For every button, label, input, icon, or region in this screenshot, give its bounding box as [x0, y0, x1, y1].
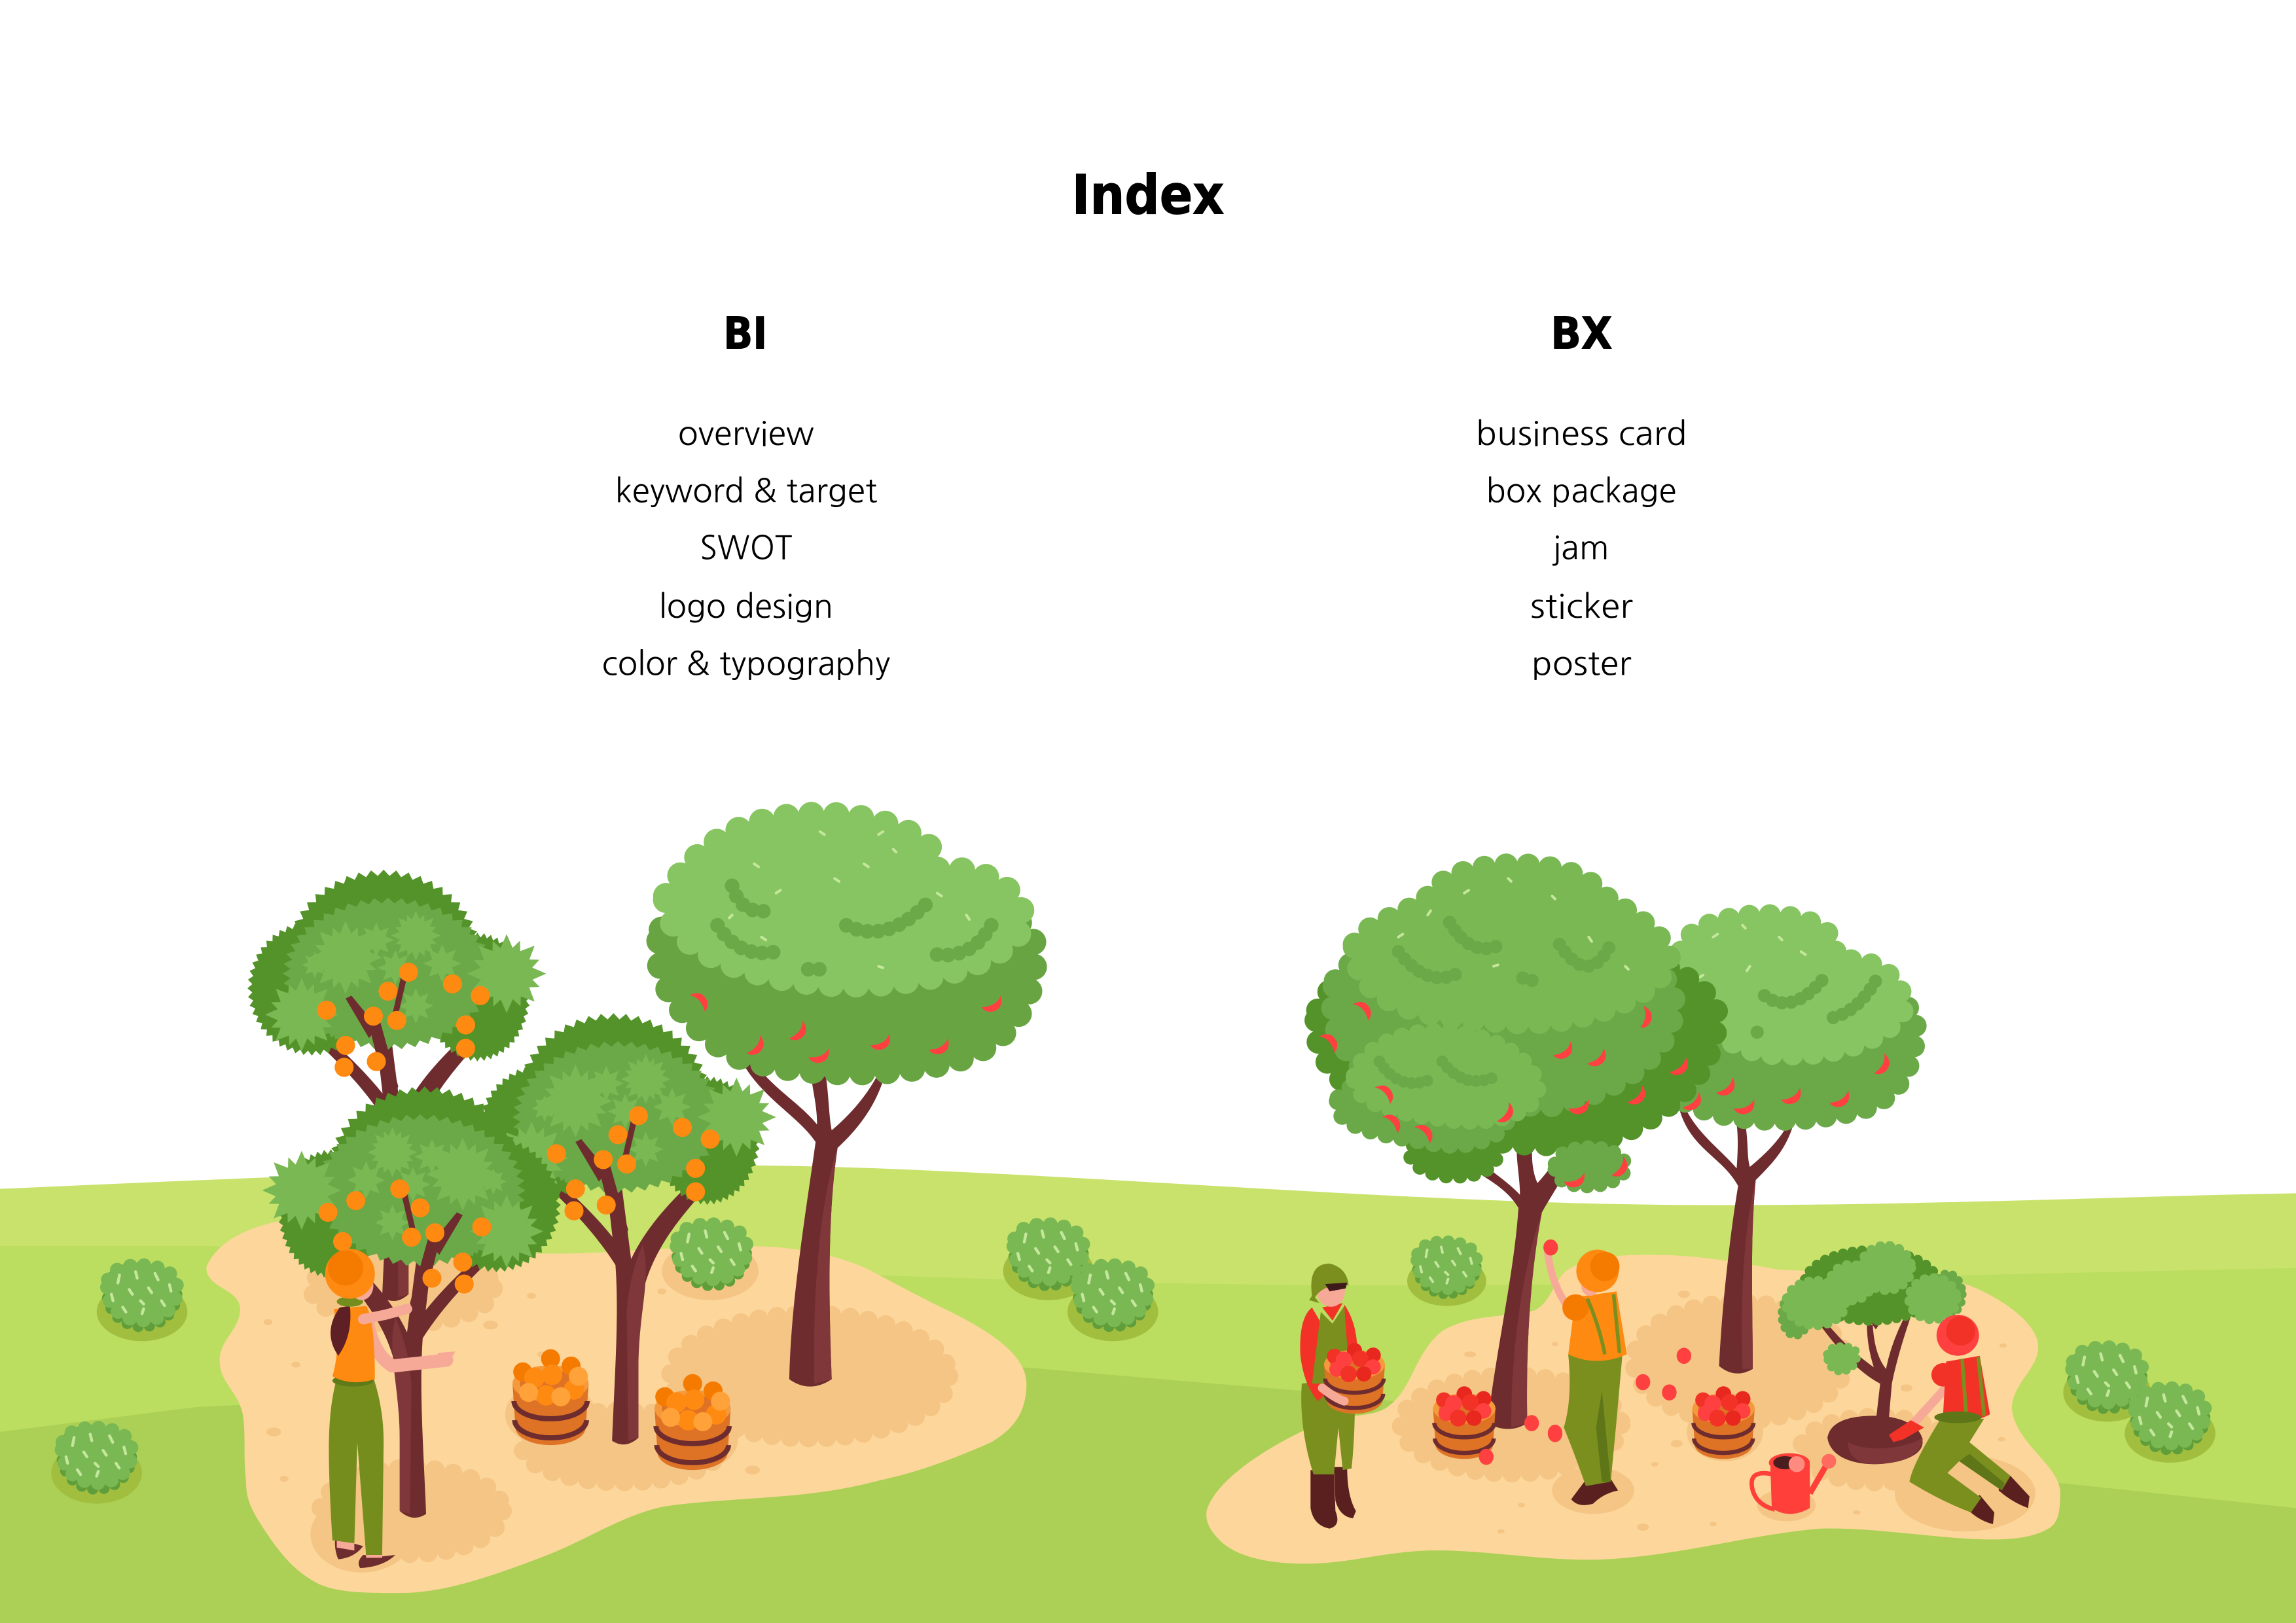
barrel of apples, by the right tree	[1693, 1386, 1755, 1459]
bushes on the grass with shadows	[51, 1224, 2215, 1504]
figure: kneeling gardener	[1889, 1315, 2030, 1524]
list: BI items: keyword & target	[615, 475, 877, 507]
title: Index	[1072, 164, 1224, 227]
list: BI items: overview	[678, 418, 814, 450]
tree: orange tree, middle	[463, 995, 783, 1444]
list: BI items: color & typography	[602, 648, 890, 680]
sapling with soil mound	[1782, 1246, 1962, 1464]
tree: orange tree, front left	[255, 1067, 575, 1518]
small shadow ellipses	[264, 1241, 2036, 1573]
orchard path: right sand patch	[1206, 1255, 2060, 1563]
list: BX items: business card	[1476, 418, 1687, 450]
list: BX items: jam	[1552, 533, 1609, 566]
list: BI items	[602, 418, 890, 680]
list: BX items: poster	[1532, 648, 1631, 680]
tree: big green apple tree, left	[659, 815, 1034, 1387]
list: BX items: box package	[1486, 475, 1677, 507]
list: BI items: logo design	[659, 591, 833, 623]
list: BI items: SWOT	[700, 533, 793, 565]
tree: right apple tree	[1672, 915, 1916, 1374]
figure: woman carrying a barrel of apples	[1300, 1264, 1385, 1529]
figure: man reaching for an apple	[1543, 1240, 1627, 1505]
tree: large front apple tree	[1316, 865, 1716, 1429]
tree: orange tree, back left	[233, 851, 553, 1301]
list: BX items: sticker	[1530, 591, 1633, 623]
barrel of oranges, left	[512, 1349, 588, 1445]
ground shadows under trees and figures	[312, 1253, 1953, 1554]
watering can	[1751, 1453, 1837, 1514]
fallen apples	[1479, 1347, 1691, 1465]
figure: woman picking oranges	[325, 1249, 456, 1568]
barrel of oranges, right	[655, 1374, 730, 1470]
orchard path: left sand patch	[206, 1218, 1026, 1593]
barrel of apples, by the trunk	[1433, 1386, 1496, 1459]
heading: BI: BI	[723, 308, 767, 359]
bush on the sand, left	[677, 1224, 746, 1285]
ground: background hills	[0, 1166, 2296, 1623]
list: BX items	[1476, 418, 1687, 680]
heading: BX: BX	[1551, 308, 1612, 359]
